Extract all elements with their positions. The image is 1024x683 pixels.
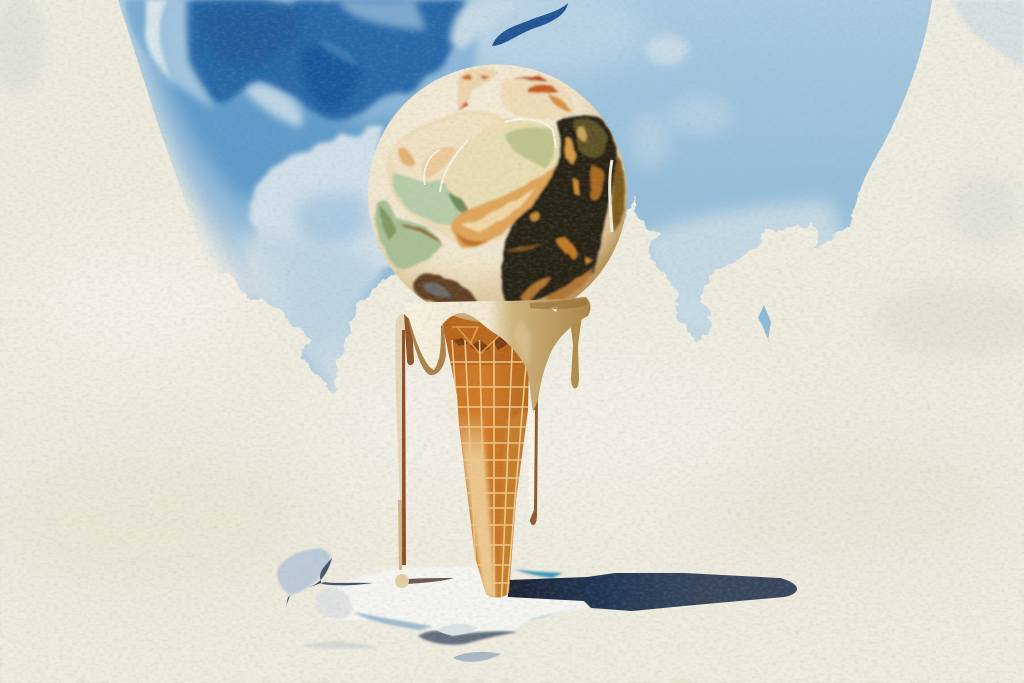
deep blue cloud: [183, 0, 465, 120]
continent: backing cream land: [387, 110, 565, 248]
continent: north patch: [457, 68, 498, 108]
jagged cloud paper mass: [0, 190, 1024, 683]
drip: right: [570, 316, 582, 388]
upper dark zone: [441, 316, 530, 365]
pale lower left: [456, 410, 496, 598]
puddle dark debris: [418, 631, 518, 645]
soft left paper edge: [0, 0, 236, 430]
bead shadow: [408, 578, 454, 584]
mid blue: [165, 75, 400, 200]
continent: south west green: [375, 200, 442, 269]
blue pocket in cumulus: [295, 193, 372, 251]
blue meltwater streak: [515, 569, 563, 578]
melted ice chunks: [277, 548, 373, 619]
cumulus cloud beside globe: [250, 130, 400, 300]
drip: long left: [395, 314, 409, 588]
waffle horizontal ribs: [450, 361, 528, 584]
blue sky wash: [118, 0, 940, 400]
top left light blue: [125, 0, 150, 57]
continent: green belt: [392, 172, 467, 224]
drip: small dark: [404, 314, 414, 365]
dark sky sliver: [492, 3, 568, 46]
soft column: [162, 0, 215, 110]
melting ice cream drips: [395, 297, 591, 588]
continent: west pale landmass: [391, 114, 498, 181]
continent: orange coast: [450, 165, 558, 250]
shade lower right: [498, 410, 528, 598]
melt shadow tail: [408, 318, 446, 375]
faint high clouds: [645, 35, 689, 65]
smooth upper right paper edge: [850, 0, 1024, 235]
darkest blue: [300, 45, 362, 112]
small puddle: [453, 652, 501, 662]
cone shadow: [508, 573, 797, 611]
waffle cone: [442, 316, 529, 598]
melt dark lip: [530, 298, 588, 309]
top right pale cloud: [450, 0, 530, 49]
east sliver: [612, 155, 625, 232]
pale wisp over deep blue: [335, 0, 426, 30]
left sky layers: [125, 0, 568, 400]
drip: cone left: [448, 385, 457, 422]
drip: long centre: [528, 400, 538, 525]
pale upper sky near globe: [430, 0, 650, 75]
lower pale cloud band: [640, 200, 850, 340]
cream swirl: [145, 0, 172, 80]
brown coast: [520, 268, 593, 303]
globe scoop: [368, 64, 627, 324]
faint puddle: [301, 641, 380, 648]
pale cloud in deep sky: [245, 85, 302, 128]
puddle blue rim: [353, 606, 587, 630]
melt body: [405, 297, 591, 412]
small blue crack: [758, 305, 772, 348]
lower brown patch: [413, 274, 480, 304]
continent: dark scorched land: [502, 115, 617, 304]
waffle dark diamonds: [453, 337, 508, 352]
melt highlights: [515, 320, 530, 365]
continent: centre: [458, 149, 459, 150]
continent: north east patch: [500, 76, 574, 119]
melt streaks on globe: [424, 119, 556, 192]
gold islands: [565, 138, 577, 164]
waffle vertical ribs: [452, 340, 528, 598]
waffle diagonal ribs: [452, 327, 505, 354]
dark crack: [286, 558, 373, 606]
lower pale blue: [240, 233, 385, 395]
puddle: [301, 566, 587, 662]
